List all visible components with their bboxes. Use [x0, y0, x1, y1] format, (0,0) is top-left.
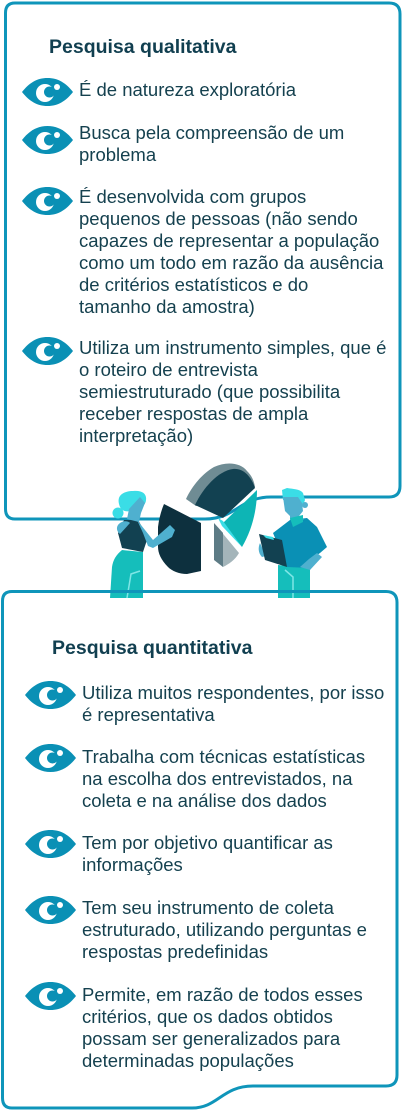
icons: qualitative list eyes: [22, 78, 73, 365]
text: item 3: informações: [82, 854, 183, 875]
text: item 2: na escolha dos entrevistados, na: [82, 768, 352, 789]
text: item 1: É de natureza exploratória: [79, 79, 296, 100]
woman: torso: [118, 520, 148, 552]
text: item 4: respostas predefinidas: [82, 941, 268, 962]
man: right hand: [300, 553, 322, 570]
man: face and neck: [283, 497, 304, 520]
text: item 3: como um todo em razão da ausência: [79, 252, 383, 273]
pie chart: grey rim: [186, 464, 255, 506]
text: item 3: [79, 186, 384, 317]
text: item 3: de critérios estatísticos e do: [79, 274, 308, 295]
text: item 2: [79, 122, 344, 165]
pie chart: teal slice: [223, 490, 257, 547]
text: item 4: estruturado, utilizando perguntas e: [82, 919, 367, 940]
text: item 4: [82, 897, 367, 962]
text: item 2: Busca pela compreensão de um: [79, 122, 344, 143]
text: item 5: critérios, que os dados obtidos: [82, 1006, 333, 1027]
text: item 5: determinadas populações: [82, 1050, 294, 1071]
man: clipboard: [259, 534, 287, 567]
text: item 5: possam ser generalizados para: [82, 1028, 340, 1049]
text: item 3: capazes de representar a população: [79, 230, 379, 251]
text: item 1: é representativa: [82, 704, 215, 725]
text: item 3: Tem por objetivo quantificar as: [82, 832, 333, 853]
text: item 4: [79, 337, 386, 446]
text: item 5: Permite, em razão de todos esses: [82, 984, 363, 1005]
text: item 2: [82, 746, 365, 811]
illustration: people with pie chart: [110, 464, 327, 598]
text: item 3: É desenvolvida com grupos: [79, 186, 306, 207]
panel: quantitative frame: [2, 592, 397, 1108]
woman: face and neck: [127, 497, 145, 522]
pie chart: dark slice: [195, 469, 255, 518]
text: item 3: tamanho da amostra): [79, 296, 255, 317]
man: shirt: [273, 518, 327, 568]
woman: pants: [110, 550, 143, 598]
man: collar: [290, 515, 303, 527]
icons: quantitative list eyes: [25, 681, 76, 1010]
text: item 4: interpretação): [79, 425, 193, 446]
text: item 4: o roteiro de entrevista: [79, 359, 258, 380]
man: left hand: [259, 543, 266, 557]
text: item 2: coleta e na análise dos dados: [82, 790, 327, 811]
text: item 3: [82, 832, 333, 875]
pie chart: dark shield slice: [158, 504, 201, 574]
heading: qualitative: Pesquisa qualitativa: [49, 36, 236, 58]
text: item 2: Trabalha com técnicas estatísticas: [82, 746, 365, 767]
text: item 4: Utiliza um instrumento simples, que é: [79, 337, 386, 358]
text: item 3: pequenos de pessoas (não sendo: [79, 208, 358, 229]
text: item 1: Utiliza muitos respondentes, por isso: [82, 682, 384, 703]
man: hair: [282, 488, 305, 508]
pie chart: grey slice: [214, 523, 239, 567]
man: pants: [278, 565, 310, 598]
text: item 4: semiestruturado (que possibilita: [79, 381, 340, 402]
heading: quantitative: Pesquisa quantitativa: [52, 637, 252, 659]
panel: qualitative frame: [6, 3, 400, 519]
text: item 4: Tem seu instrumento de coleta: [82, 897, 334, 918]
text: item 4: receber respostas de ampla: [79, 403, 308, 424]
text: item 5: [82, 984, 363, 1071]
woman: hair: [119, 491, 146, 511]
text: item 2: problema: [79, 144, 156, 165]
text: item 1: [82, 682, 384, 725]
